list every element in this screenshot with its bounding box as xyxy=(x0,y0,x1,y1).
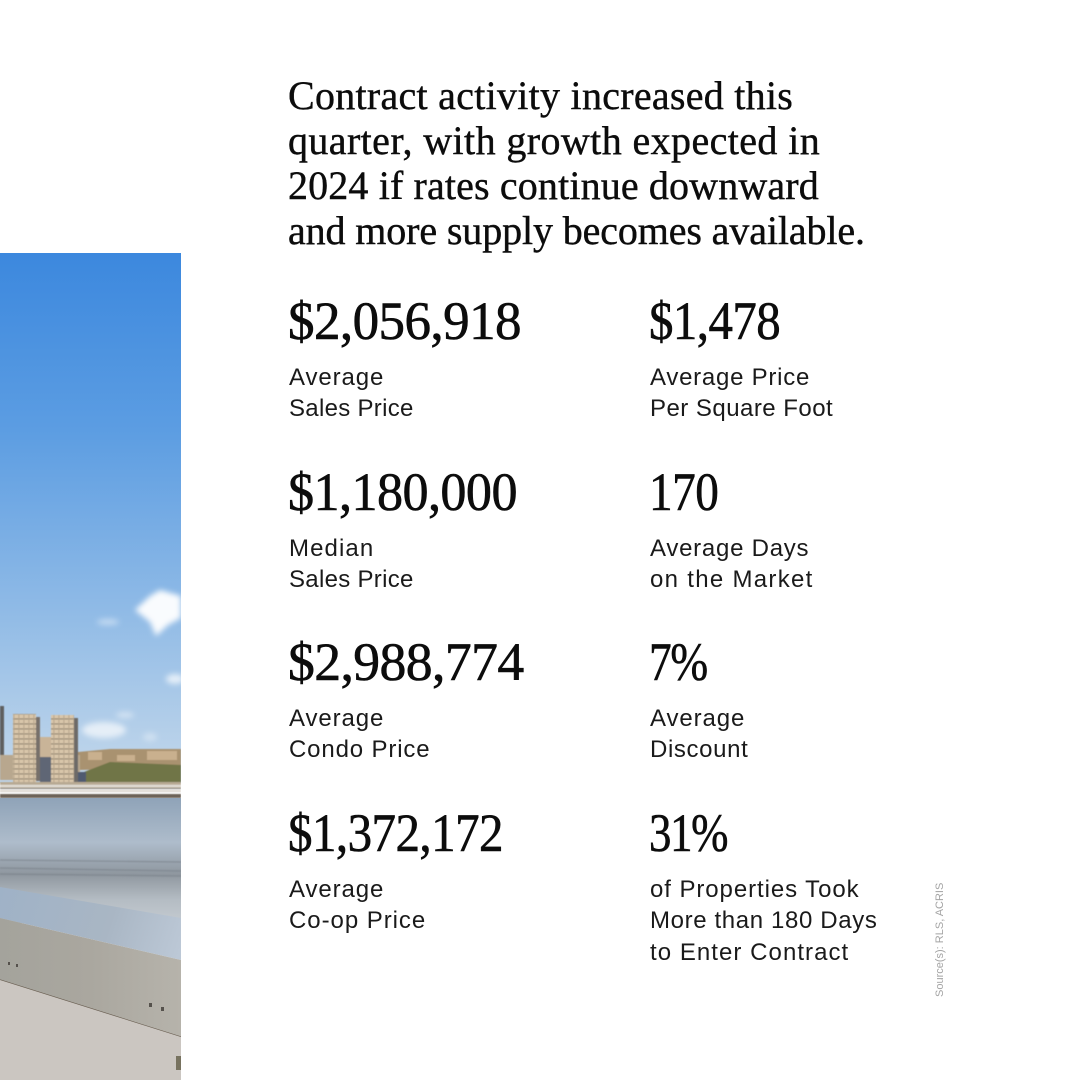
water xyxy=(0,798,181,923)
stat: average condo price: Condo Price xyxy=(289,736,430,763)
stat: average sales price: Sales Price xyxy=(289,395,414,422)
stat: properties over 180 days: to Enter Contract xyxy=(650,939,849,966)
stat: average discount xyxy=(649,632,748,763)
stat: average sales price: Average xyxy=(289,364,384,391)
stat: average sales price: $2,056,918 xyxy=(288,291,521,351)
stat: average price per square foot: Per Square Foot xyxy=(650,395,833,422)
stat: average price per square foot: $1,478 xyxy=(649,291,780,351)
stat: average days on the market: 170 xyxy=(649,462,718,522)
terrace ledge top xyxy=(0,887,181,960)
heading: and more supply becomes available. xyxy=(288,208,865,253)
stat: average condo price: Average xyxy=(289,705,384,732)
stat: properties over 180 days: 31% xyxy=(649,803,727,863)
stat: average days on the market xyxy=(649,462,814,593)
stat: properties over 180 days: More than 180 Days xyxy=(650,907,877,934)
stat: average co-op price xyxy=(288,803,503,934)
stat: average condo price xyxy=(288,632,524,763)
stat: average sales price xyxy=(288,291,521,422)
stat: average co-op price: Co-op Price xyxy=(289,907,426,934)
stat: average price per square foot xyxy=(649,291,833,422)
sky xyxy=(0,253,181,783)
skyline xyxy=(0,706,181,798)
stat: average co-op price: Average xyxy=(289,876,384,903)
heading: Contract activity increased this xyxy=(288,73,793,118)
photo: waterfront skyline seen from a terrace xyxy=(0,253,181,1080)
stat: average discount: 7% xyxy=(649,632,707,692)
stat: average discount: Average xyxy=(650,705,745,732)
stat: average days on the market: Average Days xyxy=(650,535,809,562)
clouds xyxy=(82,590,184,741)
stat: median sales price: Sales Price xyxy=(289,566,414,593)
stat: properties over 180 days: of Properties Took xyxy=(650,876,860,903)
source note: Source(s): RLS, ACRIS xyxy=(934,883,946,997)
heading: 2024 if rates continue downward xyxy=(288,163,819,208)
heading xyxy=(288,73,865,253)
terrace wall xyxy=(0,918,181,1037)
stat: average condo price: $2,988,774 xyxy=(288,632,524,692)
stat: average price per square foot: Average Price xyxy=(650,364,810,391)
terrace lower wall xyxy=(0,980,181,1080)
stat: properties over 180 days xyxy=(649,803,877,966)
stat: average discount: Discount xyxy=(650,736,748,763)
stat: median sales price: Median xyxy=(289,535,374,562)
heading: quarter, with growth expected in xyxy=(288,118,820,163)
stat: average days on the market: on the Market xyxy=(650,566,814,593)
stat: average co-op price: $1,372,172 xyxy=(288,803,503,863)
stat: median sales price: $1,180,000 xyxy=(288,462,517,522)
stat: median sales price xyxy=(288,462,517,593)
